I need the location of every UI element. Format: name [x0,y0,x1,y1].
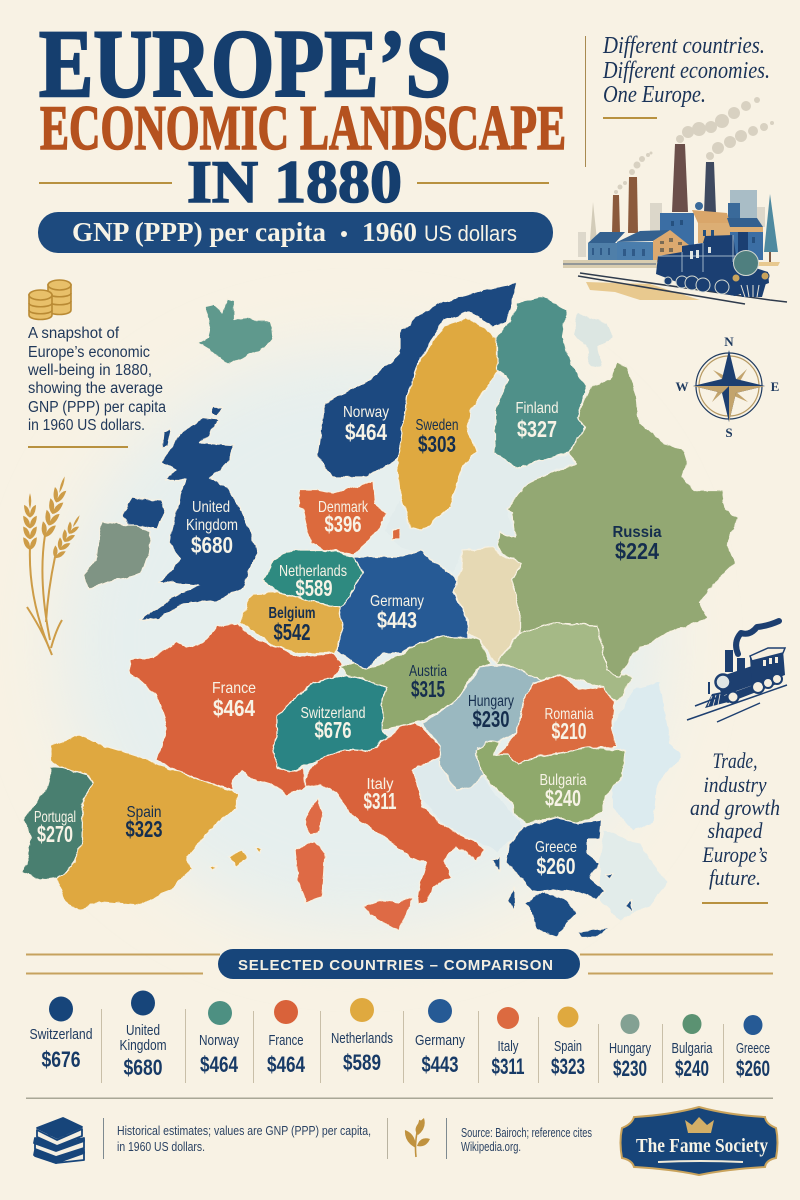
intro text [27,325,166,448]
item: Netherlands: $589 [343,1050,381,1075]
item: Germany: $443 [422,1052,458,1077]
item: Germany [415,999,465,1077]
compass rose: E [771,379,779,394]
Iceland [198,299,273,364]
side caption [690,748,780,904]
item: Switzerland: $676 [42,1047,80,1072]
item: United Kingdom: $680 [124,1055,162,1080]
label: Greece: $260 [536,853,576,879]
label: Greece [535,839,577,879]
label: Denmark [318,499,369,537]
label: Greece: Greece [535,839,577,856]
label: Romania [544,706,594,744]
icon: books [34,1118,84,1163]
France [130,623,343,797]
label: Portugal: $270 [37,821,73,847]
intro text: Europe’s economic [28,344,150,361]
item: United Kingdom: Kingdom [120,1037,166,1054]
item: Switzerland: Switzerland [30,1026,92,1043]
map of Europe [23,283,738,937]
item: Norway: Norway [199,1032,239,1049]
source text [446,1118,592,1159]
side caption: shaped [708,818,763,843]
illustration: factory and locomotive [563,97,787,304]
label: Germany [370,593,424,633]
label: Bulgaria [540,772,587,811]
icon: wheat [23,474,85,655]
item: France [267,1000,306,1077]
label: Portugal [34,809,76,847]
label: United Kingdom: $680 [191,532,233,558]
Austria [340,637,490,730]
label: Bulgaria: Bulgaria [540,772,587,789]
label: Finland: $327 [517,416,557,442]
Norway [317,283,517,477]
label: Russia [612,524,662,564]
compass rose: S [725,425,733,440]
label: Switzerland: Switzerland [300,705,366,722]
intro text: GNP (PPP) per capita [28,399,166,416]
subtitle pill [38,212,553,253]
comparison row [30,990,770,1083]
Hungary [423,665,540,790]
label: Finland: Finland [516,400,558,417]
compass rose: N [724,334,734,349]
United Kingdom [121,405,258,621]
label: Belgium [268,605,316,645]
item: United Kingdom [120,990,166,1080]
icon: steam train [687,621,787,722]
label: France: France [212,680,256,697]
label: Hungary: Hungary [468,693,514,710]
intro text: A snapshot of [28,325,120,342]
label: Netherlands: $589 [296,575,332,601]
label: Sweden: Sweden [416,417,458,434]
note text: in 1960 US dollars. [117,1139,205,1154]
tagline: Different economies. [602,58,770,84]
item: Spain: Spain [554,1038,582,1055]
item: Germany: Germany [415,1032,465,1049]
Bulgaria [475,742,625,823]
item: Greece: Greece [736,1040,770,1057]
seas and pale regions [385,313,682,920]
compass rose: W [676,379,688,394]
label: Netherlands: Netherlands [279,563,347,580]
item: Netherlands: Netherlands [331,1030,393,1047]
side caption: future. [709,865,761,890]
tagline: One Europe. [603,82,706,108]
comparison heading: SELECTED COUNTRIES – COMPARISON [238,957,553,974]
label: Romania: $210 [552,718,586,744]
countries [23,283,738,937]
label: United Kingdom [186,499,238,558]
tagline [585,33,770,167]
side caption: and growth [690,795,780,820]
label: Denmark: $396 [324,511,362,537]
label: Romania: Romania [544,706,594,723]
label: Spain: $323 [126,816,162,842]
icon: coins [29,280,71,320]
item: France: France [268,1032,304,1049]
label: Hungary: $230 [472,706,510,732]
Switzerland [272,675,388,772]
label: Germany: $443 [377,607,417,633]
item: Hungary [609,1014,651,1081]
Belgium [240,592,343,653]
Finland [495,297,587,468]
label: Denmark: Denmark [318,499,369,516]
label: Norway: $464 [345,419,387,445]
item: United Kingdom: United [126,1022,160,1039]
intro text: showing the average [28,380,163,397]
label: Sweden [416,417,458,457]
logo: The Fame Society: The Fame Society [636,1135,768,1157]
label: Portugal: Portugal [34,809,76,826]
Poland [453,547,522,663]
label: Finland [516,400,558,442]
label: Russia: $224 [615,538,659,564]
Romania [497,675,617,763]
Portugal [23,767,93,880]
label: Bulgaria: $240 [545,785,581,811]
Denmark [298,482,387,555]
intro text: in 1960 US dollars. [28,417,145,434]
label: Sweden: $303 [418,431,456,457]
Ukraine [495,623,633,703]
Russia [497,363,738,677]
source text: Source: Bairoch; reference cites [461,1126,592,1140]
item: Italy [492,1007,524,1079]
note text: Historical estimates; values are GNP (PPP) per capita, [117,1123,371,1138]
label: France [212,680,256,721]
label: Austria [409,663,447,702]
logo: The Fame Society [620,1107,778,1175]
label: Netherlands [279,563,347,601]
label: Switzerland [300,705,366,743]
item: Hungary: Hungary [609,1040,651,1057]
label: Austria: $315 [411,676,445,702]
subtitle pill: GNP (PPP) per capita [72,217,327,247]
label: France: $464 [213,695,255,721]
label: Austria: Austria [409,663,447,680]
label: Italy: Italy [366,776,394,793]
label: Germany: Germany [370,593,424,610]
label: Belgium: $542 [274,619,310,645]
title: ECONOMIC LANDSCAPE [40,93,566,163]
Sweden [397,317,500,530]
label: Belgium: Belgium [268,605,316,622]
item: Netherlands [331,998,393,1075]
label: Italy: $311 [364,788,397,814]
label: Norway [343,404,389,445]
label: Italy [364,776,397,814]
Ireland [82,521,151,589]
item: France: $464 [267,1052,306,1077]
item: Switzerland [30,996,92,1072]
item: Spain: $323 [551,1054,585,1079]
item: Hungary: $230 [613,1056,647,1081]
label: United Kingdom: United [192,499,230,516]
label: Russia: Russia [612,524,662,541]
label: Spain [126,804,162,842]
comparison heading [26,949,773,979]
item: Bulgaria: $240 [675,1056,709,1081]
label: Spain: Spain [126,804,162,821]
item: Bulgaria [672,1014,713,1081]
item: Norway [199,1001,239,1077]
label: Hungary [468,693,514,732]
Italy [305,722,483,903]
Netherlands [263,550,362,608]
compass rose [676,334,779,440]
Spain [50,735,237,910]
label: Switzerland: $676 [314,717,352,743]
item: Norway: $464 [200,1052,239,1077]
side caption: industry [704,772,767,797]
title [39,10,566,215]
tagline: Different countries. [602,33,765,59]
Germany [337,550,468,670]
Greece [493,818,632,937]
subtitle pill: US dollars [424,221,517,246]
item: Spain [551,1006,585,1079]
title: IN 1880 [187,149,402,215]
item: Bulgaria: Bulgaria [672,1040,713,1057]
intro text: well-being in 1880, [27,362,152,379]
item: Italy: Italy [498,1038,519,1055]
subtitle pill: 1960 [362,217,417,247]
side caption: Trade, [712,748,758,773]
item: Greece: $260 [736,1056,770,1081]
title: EUROPE’S [39,10,451,117]
item: Greece [736,1015,770,1081]
side caption: Europe’s [702,842,768,867]
item: Italy: $311 [492,1054,524,1079]
label: United Kingdom: Kingdom [186,517,238,534]
icon: laurel sprig [405,1118,430,1157]
source text: Wikipedia.org. [461,1140,521,1154]
label: Norway: Norway [343,404,389,421]
note text [103,1118,371,1159]
